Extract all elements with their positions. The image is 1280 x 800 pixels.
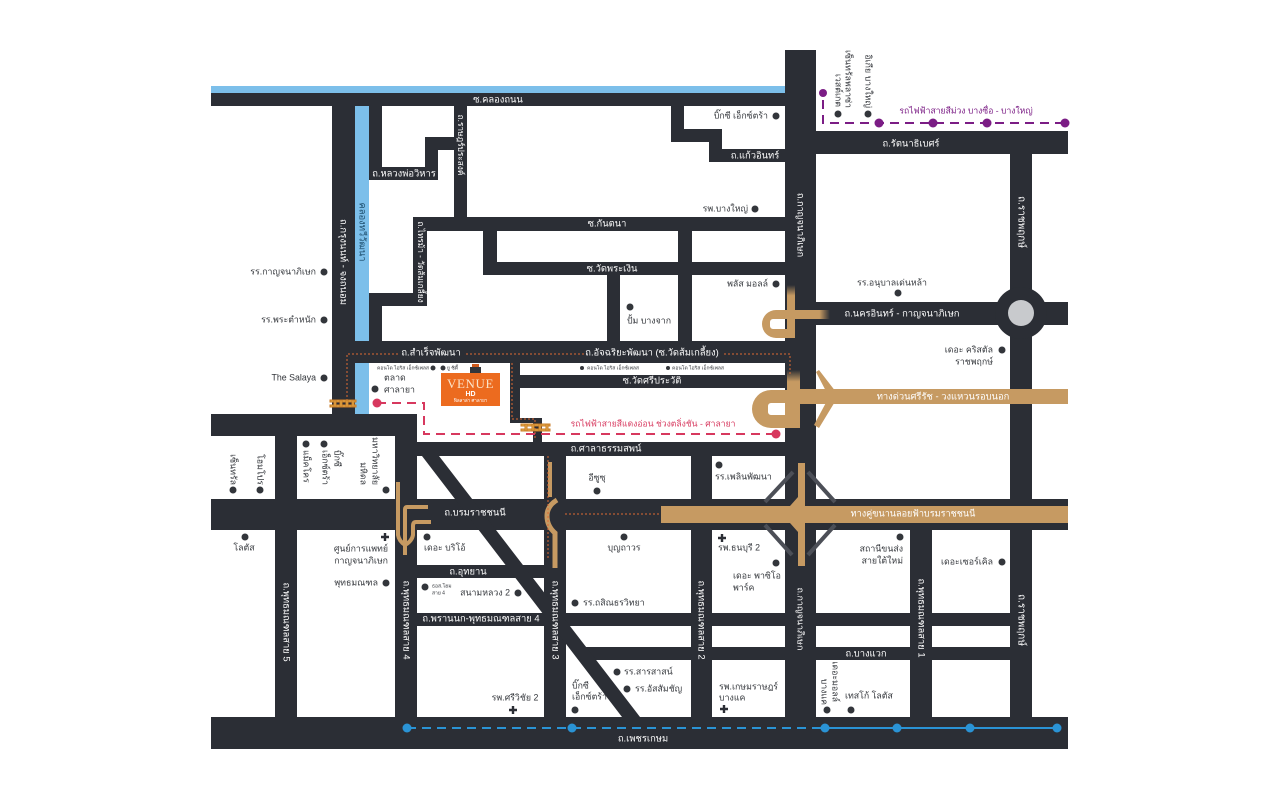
place labels: เซ็นทรัลพลาซ่า [844,50,855,108]
place labels: รร.พระตำหนัก [261,314,316,324]
hospital plus icons [381,533,728,714]
place labels: รร.อัสสัมชัญ [635,683,682,693]
place labels: คอนโด ไอริส เอ็กซ์เพลส [587,363,639,371]
place labels: โฮมโปร [256,454,266,485]
place labels: เทสโก้ โลตัส [845,690,893,700]
place labels: รพ.เกษมราษฎร์ [719,681,778,691]
venue marker [441,364,500,406]
purple rail line [819,89,1070,128]
road labels horizontal: ถ.บางแวก [845,647,887,658]
road labels vertical: ถ.พุทธมณฑลสาย 1 [916,578,928,658]
place labels: พาร์ค [733,582,754,592]
venue marker: VENUE [447,376,494,391]
place labels: สาย 4 [432,590,445,596]
road labels vertical: ถ.พุทธมณฑลสาย 2 [696,580,708,660]
place labels: รพ.บางใหญ่ [703,203,748,213]
place labels: สถานีขนส่ง [860,543,903,553]
place labels: สนามหลวง 2 [460,587,510,597]
place labels: แม็คโคร [302,450,313,483]
place labels: รร.กาญจนาภิเษก [250,266,316,276]
road labels vertical: ถ.พุทธมณฑลสาย 3 [550,580,562,660]
road labels horizontal: ถ.ศาลาธรรมสพน์ [571,442,642,453]
road labels horizontal [372,93,1009,743]
icon: rail bridge left [330,400,356,407]
place labels: มหิดล [359,462,369,485]
road labels horizontal: ถ.อัจฉริยะพัฒนา (ซ.วัดส้มเกลี้ยง) [585,345,719,357]
place labels: บุญถาวร [607,542,641,553]
road labels horizontal: ถ.พรานนก-พุทธมณฑลสาย 4 [422,612,540,624]
blue rail line [402,724,1062,732]
road labels horizontal: ซ.วัดพระเงิน [587,262,638,273]
place labels: บางแค [719,692,745,702]
orange elevated rail dotted line [347,354,790,560]
road labels vertical: ถ.พุทธมณฑลสาย 4 [401,580,413,660]
road labels horizontal: ถ.รัตนาธิเบศร์ [883,137,939,148]
purple rail line: รถไฟฟ้าสายสีม่วง บางซื่อ - บางใหญ่ [899,104,1033,115]
elevated expressways in gold [661,285,1068,566]
place labels: ศูนย์การแพทย์ [334,543,388,554]
place labels: รร.เพลินพัฒนา [715,471,772,481]
road labels vertical: ถ.ราษฎร์ประสงค์ [456,115,466,175]
place labels: ราชพฤกษ์ [955,356,993,366]
place labels: ตลาด [384,372,406,382]
red rail line: รถไฟฟ้าสายสีแดงอ่อน ช่วงตลิ่งชัน - ศาลายา [571,417,735,428]
place labels: เดอะมอลล์ [831,661,841,702]
place labels: ศาลายา [384,384,415,394]
road labels vertical: ถ.ราชพฤกษ์ [1015,594,1027,646]
venue marker: HD [465,391,476,398]
road labels horizontal: ซ.วัดศรีประวัติ [623,374,681,385]
place labels: เดอะเซอร์เคิล [941,556,993,566]
icon: rail bridge right [521,424,550,431]
road labels vertical: ถ.กาญจนาภิเษก [796,193,806,257]
place labels: บิ๊กซี [572,678,589,690]
place labels: เอ็กซ์ตร้า [572,690,607,701]
place labels: The Salaya [272,372,316,382]
place labels: กาญจนาภิเษก [334,555,388,565]
road labels vertical: ถ.กรุงนนท์ - จงถนอม [337,219,349,305]
place labels: อีซูซุ [588,472,606,483]
road labels horizontal: ถ.หลวงพ่อวิหาร [372,167,436,178]
road labels horizontal: ถ.แก้วอินทร์ [731,149,779,160]
place labels: รพ.ศรีวิชัย 2 [492,692,538,702]
place dots [230,110,1006,714]
place labels: เดอะ พาซิโอ [733,570,781,580]
place labels: รพ.ธนบุรี 2 [718,542,760,553]
place labels: บางแค [820,679,830,705]
place labels: ยู ซิตี้ [447,362,459,371]
road labels vertical: ถ.กาญจนาภิเษก [796,588,806,650]
place labels: อิเกีย บางใหญ่ [864,54,874,108]
red rail line [372,398,780,438]
place labels: เดอะ คริสตัล [945,344,993,354]
place labels: โลตัส [233,542,255,552]
canals [211,86,785,414]
place labels: มหาวิทยาลัย [371,437,381,485]
road labels vertical: ถ.ราชพฤกษ์ [1015,196,1027,248]
roundabout centre [1008,300,1034,326]
diamond interchange ramps [765,472,835,555]
place labels: เดอะ บริโอ้ [424,542,466,552]
road labels horizontal: ซ.กันตนา [588,217,626,228]
road labels vertical: ถ.พุทธมณฑลสาย 5 [281,582,293,662]
place labels [229,50,993,705]
road labels horizontal: ถ.นครอินทร์ - กาญจนาภิเษก [845,307,959,318]
road labels vertical [281,115,1027,662]
place labels: เวสต์เกต [834,74,844,107]
road labels horizontal: ซ.คลองถนน [473,93,523,104]
place labels: รร.สารสาสน์ [624,666,673,676]
place labels: เอ็กซ์ตร้า [321,450,332,485]
place labels: คอนโด ไอริส เอ็กซ์เพลส [377,363,429,371]
place labels: สายใต้ใหม่ [862,555,903,565]
road labels horizontal: ทางด่วนศรีรัช - วงแหวนรอบนอก [877,390,1009,401]
road labels vertical: คลองทวีวัฒนา [358,202,369,262]
road labels horizontal: ทางคู่ขนานลอยฟ้าบรมราชชนนี [851,508,975,519]
place labels: ธอส.โฮม [432,582,452,589]
place labels: พลัส มอลล์ [727,278,768,288]
place labels: รร.ถสิณธรวิทยา [583,597,645,607]
place labels: รร.อนุบาลเด่นหล้า [857,277,927,288]
place labels: พุทธมณฑล [334,577,378,588]
road labels horizontal: ถ.เพชรเกษม [618,732,668,743]
gold ramps at Phutthamonthon Sai 4 and Sai 3 [398,462,557,568]
place labels: บิ๊กซี เอ็กซ์ตร้า [714,108,768,120]
place labels: ปั้ม บางจาก [627,313,671,325]
road labels vertical: ถ.ไทรม้า - วัดส้มเกลี้ยง [416,221,427,303]
place labels: บิ๊กซี [333,450,345,467]
road network [211,50,1068,749]
place labels: คอนโด ไอริส เอ็กซ์เพลส [672,363,724,371]
place labels: เซ็นทรัล [229,454,240,485]
road labels horizontal: ถ.บรมราชชนนี [444,506,506,517]
road labels horizontal: ถ.อุทยาน [449,565,487,577]
venue marker: ฟิลลาล่า ศาลายา [453,398,488,403]
road labels horizontal: ถ.สำเร็จพัฒนา [401,345,461,357]
